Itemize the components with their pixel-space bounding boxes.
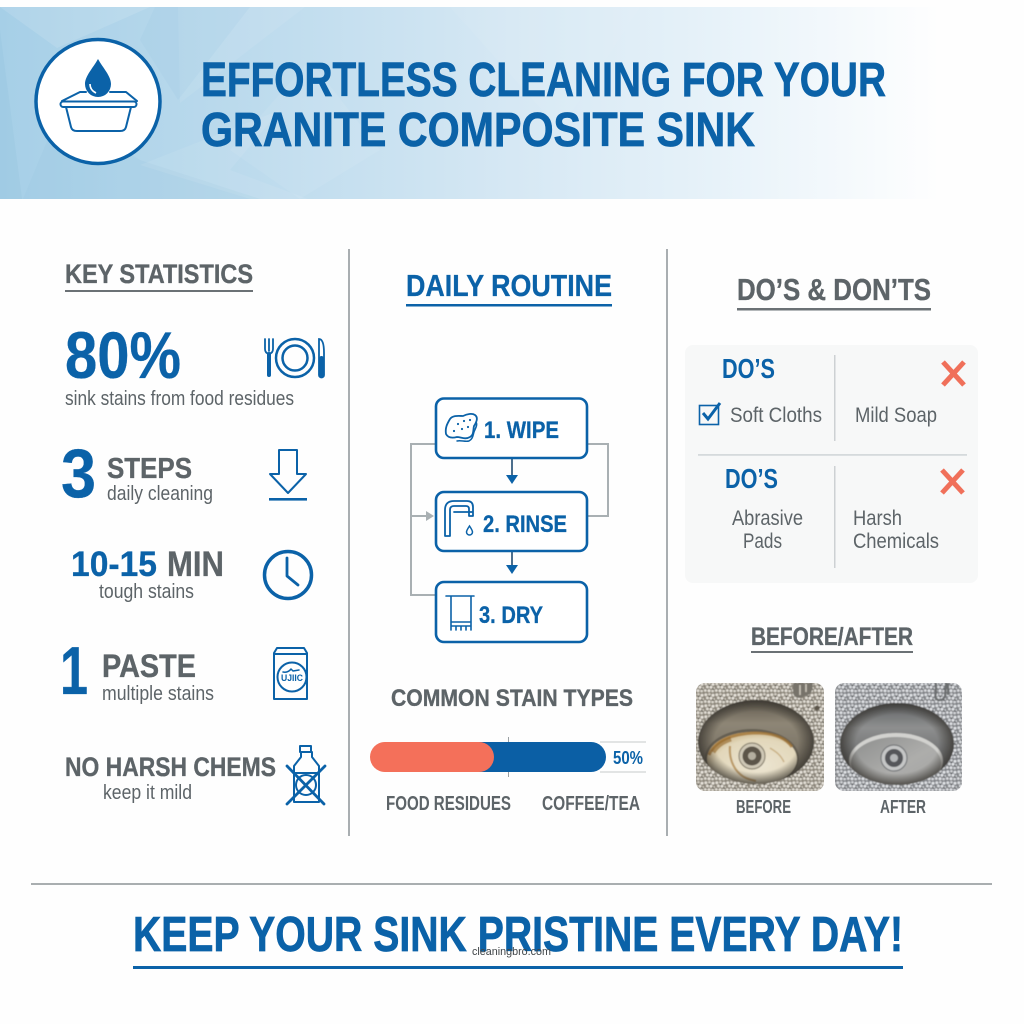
card: dos and donts table: DO’S [722,353,775,384]
heading: common stain types: COMMON STAIN TYPES [391,685,633,712]
stat: 3 steps: STEPS [107,453,192,485]
card: dos and donts table: Abrasive [732,507,803,530]
icon: checkbox [700,403,720,424]
arrow: rinse to dry [506,551,518,574]
card: dos and donts table: Harsh [853,507,902,530]
bar chart: stain types [370,737,646,815]
bar chart: stain types: FOOD RESIDUES [386,793,511,815]
panel: daily routine [370,268,646,815]
heading: key statistics: KEY STATISTICS [65,259,253,289]
card: dos and donts table: Mild Soap [855,404,937,427]
icon: paste box: UJIIC [281,673,303,683]
stat: 1 paste: 1 [60,633,88,709]
bar chart: stain types: COFFEE/TEA [542,793,640,815]
header banner [0,7,1024,199]
icon: crossed-out bottle [287,746,325,804]
step 3: dry: 3. DRY [479,602,543,629]
stat: 3 steps [61,435,213,512]
stat: no harsh chemicals: NO HARSH CHEMS [65,752,276,782]
stat: 80 percent [65,318,294,410]
photo: stained sink before [696,683,824,791]
stat: 10-15 min: 10-15 [71,545,157,584]
step 3: dry [436,582,587,642]
stat: 1 paste: multiple stains [102,683,214,705]
watermark: cleaningbro.com [472,946,551,958]
panel: dos and donts [685,272,978,817]
step 2: rinse: 2. RINSE [483,511,567,538]
heading: daily routine: DAILY ROUTINE [406,268,612,303]
stat: 10-15 min: tough stains [99,581,194,603]
icon: down arrow [269,450,307,501]
stat: 10-15 min: MIN [167,545,224,584]
stat: no harsh chemicals: keep it mild [103,782,192,804]
stat: 3 steps: 3 [61,435,96,512]
bar chart: stain types: 50% [613,748,643,768]
stat: 80 percent: sink stains from food residues [65,388,294,410]
icon: plate and cutlery [265,339,324,378]
stat: 3 steps: daily cleaning [107,483,213,505]
heading: dos and donts: DO’S & DON’TS [737,272,931,307]
step 1: wipe [436,398,587,458]
step 1: wipe: 1. WIPE [484,417,559,444]
icon: paste box [274,648,307,699]
panel: key statistics [60,259,325,804]
icon: red cross [943,362,964,385]
card: dos and donts table [685,345,978,583]
card: dos and donts table: DO’S [725,463,778,494]
title: GRANITE COMPOSITE SINK [201,104,755,157]
step 2: rinse [436,492,587,551]
icon: sink with water drop [36,40,160,164]
card: dos and donts table: Chemicals [853,530,939,553]
stat: no harsh chemicals [65,752,276,804]
title: EFFORTLESS CLEANING FOR YOUR [201,54,886,107]
stat: 80 percent: 80% [65,318,181,392]
stat: 1 paste: PASTE [102,648,196,684]
stat: 1 paste [60,633,214,709]
caption: after: AFTER [880,797,926,817]
icon: clock [264,552,312,598]
title [201,54,886,157]
stat: 10-15 min [71,545,224,603]
icon: red cross [942,470,963,493]
flow connectors [411,444,608,595]
photo: clean sink after [835,683,962,791]
card: dos and donts table: Soft Cloths [730,404,822,427]
arrow: wipe to rinse [506,458,518,484]
card: dos and donts table: Pads [743,530,782,553]
caption: before: BEFORE [736,797,791,817]
heading: before and after: BEFORE/AFTER [751,623,913,651]
